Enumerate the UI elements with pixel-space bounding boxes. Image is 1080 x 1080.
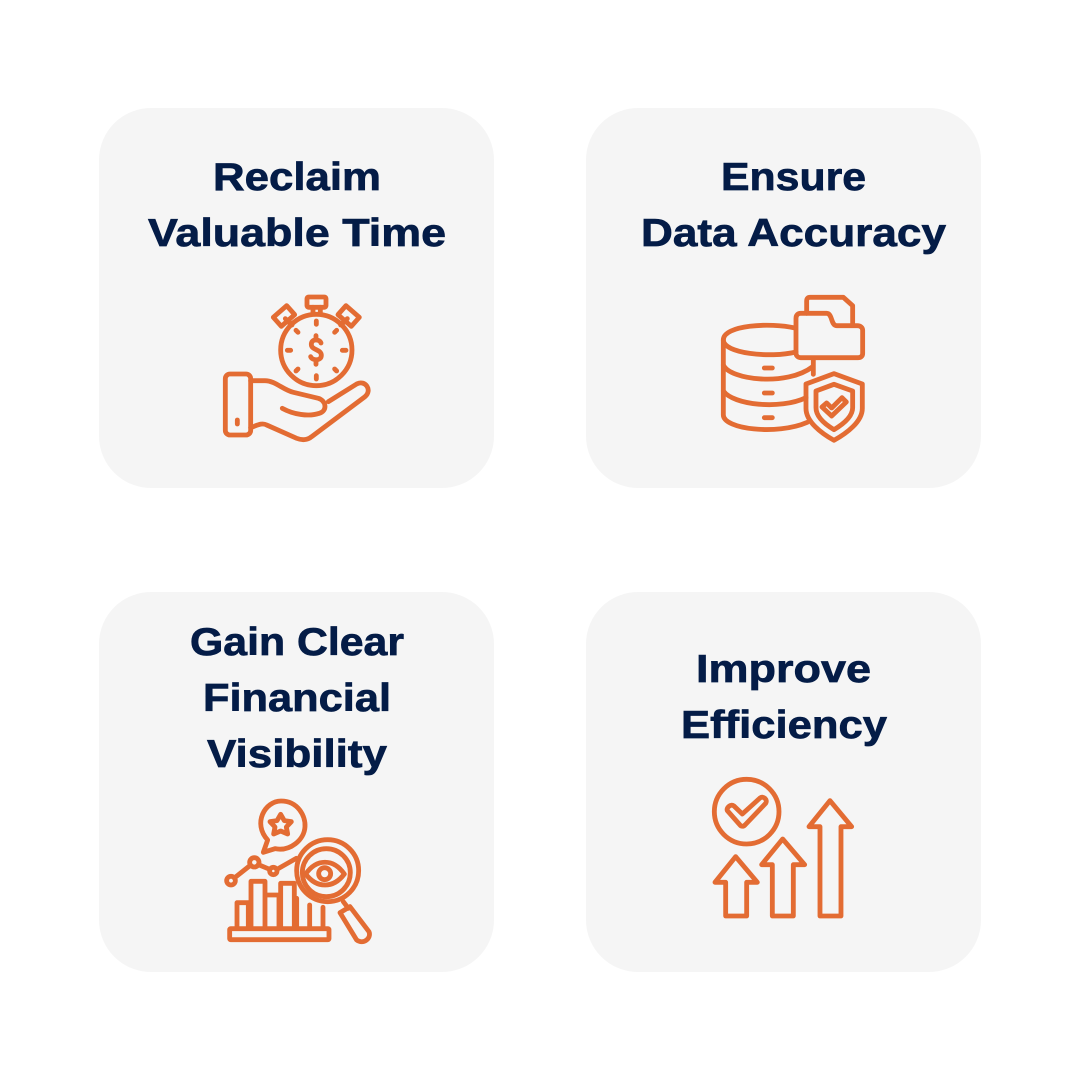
heading: reclaim valuable time: [148, 156, 446, 255]
heading: ensure data accuracy: Data Accuracy: [641, 212, 946, 255]
heading: gain clear financial visibility: Visibility: [207, 733, 387, 776]
heading: improve efficiency: [681, 648, 887, 747]
heading: improve efficiency: Efficiency: [681, 704, 887, 747]
icon: chart, speech bubble and magnifier: [227, 801, 369, 942]
heading: ensure data accuracy: [641, 156, 946, 255]
icon: database, folder and shield: [723, 297, 863, 440]
heading: gain clear financial visibility: Gain Clear: [190, 621, 404, 664]
heading: gain clear financial visibility: Financial: [203, 677, 391, 720]
icon: hand holding stopwatch: [225, 297, 368, 440]
heading: improve efficiency: Improve: [696, 648, 871, 691]
heading: reclaim valuable time: Valuable Time: [148, 212, 446, 255]
panel: ensure data accuracy: [586, 108, 981, 488]
heading: ensure data accuracy: Ensure: [721, 156, 866, 199]
heading: reclaim valuable time: Reclaim: [213, 156, 381, 199]
icon: check circle and rising arrows: [714, 779, 852, 916]
panel: improve efficiency: [586, 592, 981, 972]
heading: gain clear financial visibility: [190, 621, 404, 776]
panel: reclaim valuable time: [99, 108, 494, 488]
panel: gain clear financial visibility: [99, 592, 494, 972]
